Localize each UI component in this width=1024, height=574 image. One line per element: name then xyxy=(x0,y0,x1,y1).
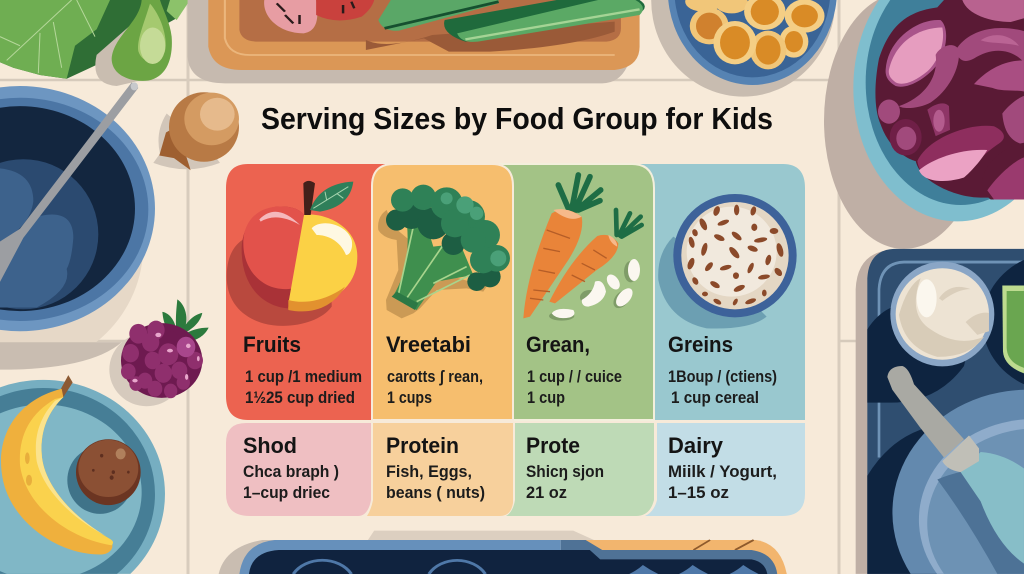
large plate with ladle xyxy=(887,366,1024,574)
icon: broccoli xyxy=(378,185,510,318)
panel: protein: Protein xyxy=(386,433,459,458)
panel: vegetables xyxy=(372,164,513,420)
panel: vegetables: carotts ʃ rean, xyxy=(387,367,483,386)
panel: fruits xyxy=(226,164,385,420)
mixing bowl with spoon xyxy=(0,82,155,370)
panel: vegetables: Vreetabi xyxy=(386,332,471,357)
bowl of pasta rings xyxy=(651,0,837,97)
panel: grains: Greins xyxy=(668,332,733,357)
icon: rice bowl xyxy=(658,194,797,329)
panel: lower green cell: Shicŋ sjon xyxy=(526,462,604,481)
panel: grains: 1Boup / (ctiens) xyxy=(668,367,777,386)
green dish xyxy=(1002,285,1024,373)
panel: lower pink cell: Chca braph ) xyxy=(243,462,339,481)
panel: grains: 1 cup cereal xyxy=(671,388,759,407)
icon: apple xyxy=(227,181,357,326)
plate with banana and chocolate ball xyxy=(0,375,165,574)
cutting board with vegetables xyxy=(188,0,645,83)
panel: green foods: 1 cup / / cuice xyxy=(527,367,622,386)
panel: fruits: Fruits xyxy=(243,332,301,357)
blackberry xyxy=(109,299,209,406)
panel: protein xyxy=(367,423,513,516)
panel: lower pink cell: 1–cup driec xyxy=(243,483,330,502)
panel: dairy xyxy=(645,423,805,516)
panel: dairy: 1–15 oz xyxy=(668,483,729,502)
panel: dairy: Dairy xyxy=(668,433,724,458)
panel: green foods: Grean, xyxy=(526,332,590,357)
panel: lower pink cell xyxy=(226,423,371,516)
title: Serving Sizes by Food Group for Kids xyxy=(261,101,773,136)
hazelnut xyxy=(153,92,239,170)
panel: lower green cell: 21 oz xyxy=(526,483,567,502)
panel: vegetables: 1 cups xyxy=(387,388,432,407)
panel: green foods xyxy=(500,164,654,420)
panel: protein: Fish, Eggs, xyxy=(386,462,472,481)
panel: grains xyxy=(640,164,805,420)
icon: carrots and beans xyxy=(523,175,642,321)
bowl of purple vegetables xyxy=(824,0,1024,249)
food group table xyxy=(226,164,805,516)
panel: fruits: 1½25 cup dried xyxy=(245,388,355,407)
panel: protein: beans ( nuts) xyxy=(386,483,485,502)
bottom tray xyxy=(219,531,787,574)
panel: dairy: Miilk / Yogurt, xyxy=(668,462,777,481)
panel: green foods: 1 cup xyxy=(527,388,565,407)
dark serving tray xyxy=(856,249,1024,574)
panel: lower pink cell: Shod xyxy=(243,433,297,458)
panel: lower green cell: Prote xyxy=(526,433,580,458)
panel: fruits: 1 cup /1 medium xyxy=(245,367,362,386)
panel: lower green cell xyxy=(506,423,654,516)
cream dip bowl xyxy=(890,262,994,366)
leafy greens and pear xyxy=(0,0,190,86)
